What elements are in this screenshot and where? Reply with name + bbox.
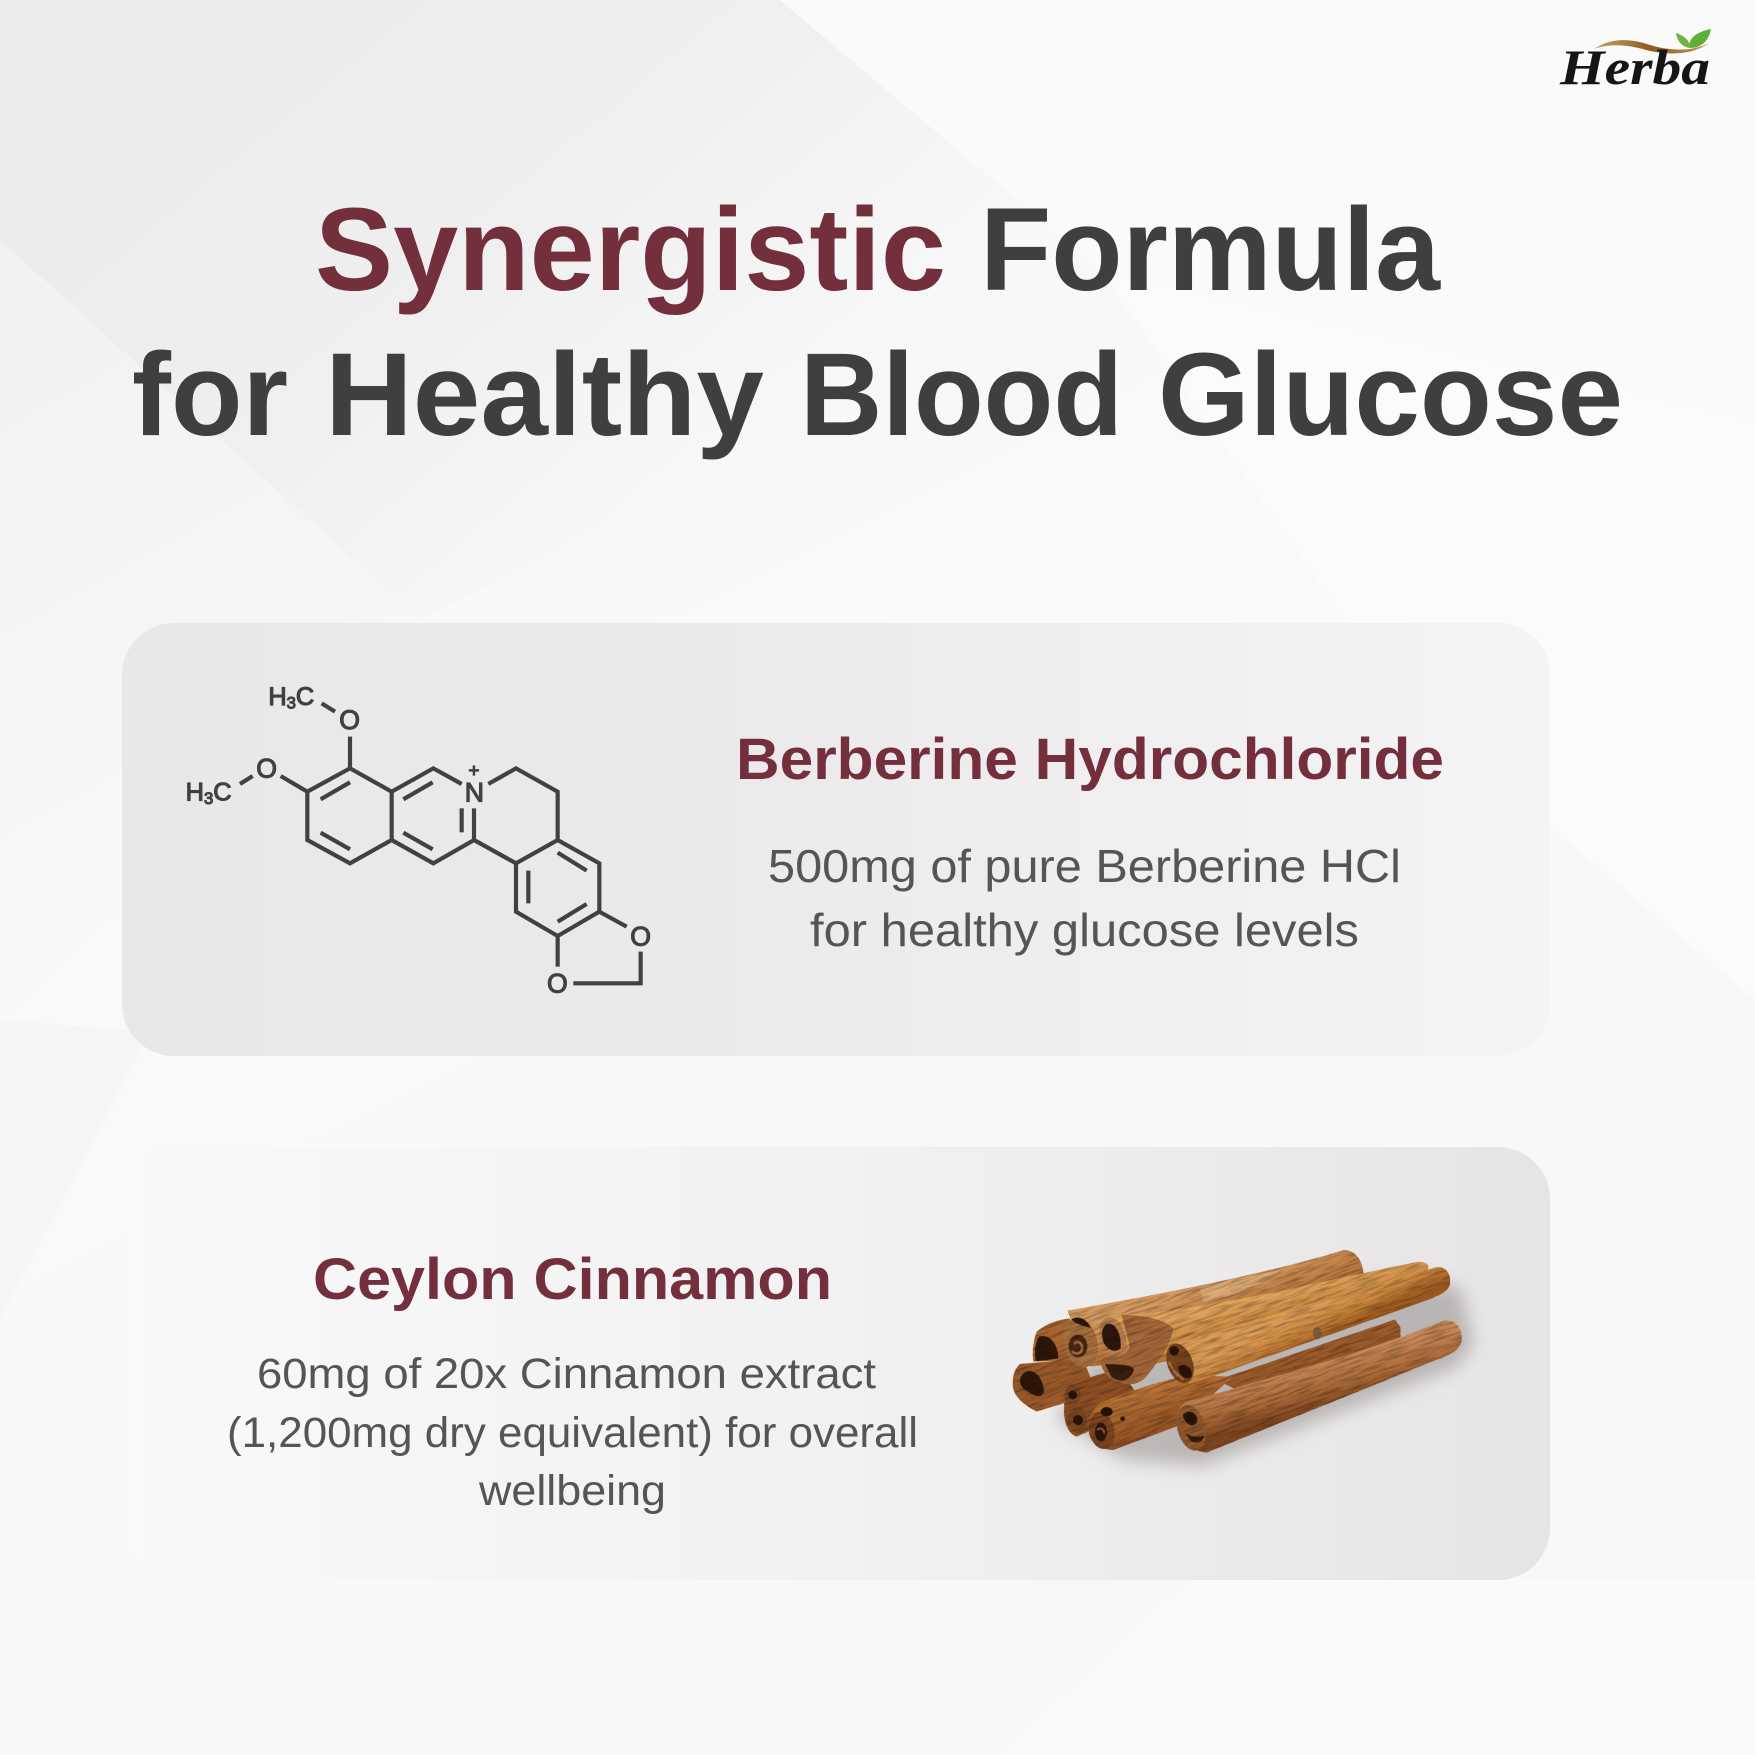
logo wordmark: Herba <box>1559 39 1710 95</box>
front stick <box>1177 1320 1462 1453</box>
title line two: Glucose <box>1158 329 1623 461</box>
description: cinnamon: wellbeing <box>478 1467 666 1515</box>
molecule diagram: H <box>268 683 287 711</box>
molecule diagram: 3 <box>204 789 213 808</box>
logo leaves <box>1676 29 1711 48</box>
description: cinnamon: 60mg of 20x Cinnamon extract <box>257 1350 876 1398</box>
title <box>132 184 1623 461</box>
molecule diagram: O <box>339 705 360 735</box>
small back-left stick <box>1033 1318 1087 1362</box>
title line two: Blood <box>800 329 1123 461</box>
title line two: for <box>132 329 288 461</box>
description: cinnamon <box>227 1350 918 1515</box>
title line two <box>132 329 1623 461</box>
title line one: Synergistic <box>315 184 946 316</box>
description: cinnamon: (1,200mg dry equivalent) for overall <box>227 1409 918 1457</box>
heading: berberine: Berberine Hydrochloride <box>736 727 1444 792</box>
title line one: Formula <box>980 184 1441 316</box>
main upper stick <box>1166 1267 1450 1383</box>
heading: cinnamon: Ceylon Cinnamon <box>313 1247 832 1312</box>
image: cinnamon sticks <box>947 1106 1528 1599</box>
back stick <box>1067 1250 1364 1367</box>
description: berberine <box>768 840 1401 956</box>
description: berberine: 500mg of pure Berberine HCl <box>768 840 1401 892</box>
logo swoosh <box>1594 40 1709 53</box>
left front stick <box>1013 1358 1097 1412</box>
spiral stick end <box>1058 1314 1103 1371</box>
title line two: Healthy <box>325 329 764 461</box>
molecule diagram: + <box>469 760 479 781</box>
molecule diagram: O <box>630 922 651 952</box>
molecule diagram: 3 <box>287 693 296 712</box>
hidden stick behind front <box>1217 1319 1401 1400</box>
title line one <box>315 184 1441 316</box>
molecule diagram: C <box>296 683 314 711</box>
description: berberine: for healthy glucose levels <box>810 904 1359 956</box>
molecule diagram: H <box>186 779 204 807</box>
panel: berberine <box>122 623 1550 1056</box>
frayed stick end <box>1101 1315 1173 1384</box>
textured sticks <box>947 1106 1528 1599</box>
panel: cinnamon <box>122 1106 1550 1599</box>
lower small sticks <box>1064 1370 1147 1437</box>
molecule diagram: N <box>465 777 484 807</box>
logo: Herba <box>1559 29 1711 95</box>
molecule diagram <box>186 683 651 999</box>
lower centre stick <box>1088 1375 1233 1450</box>
tan middle stick <box>1110 1262 1429 1367</box>
molecule diagram: O <box>256 754 277 784</box>
molecule diagram: O <box>547 969 568 999</box>
molecule diagram: C <box>213 779 232 807</box>
stick shadow <box>1057 1280 1473 1467</box>
